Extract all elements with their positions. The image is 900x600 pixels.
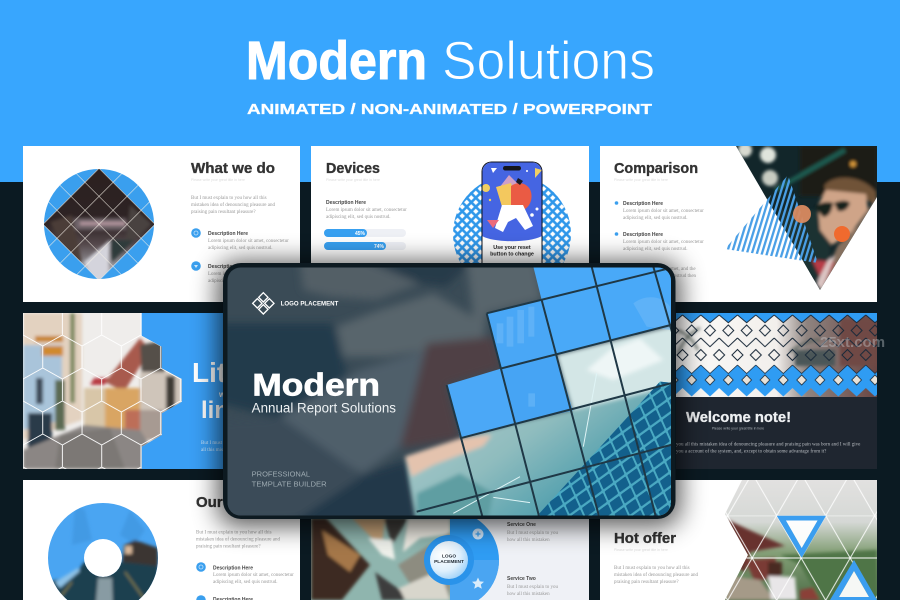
text block: first item: adipiscing elit, sed quis nostrud. [623,216,687,221]
text block: third item [623,267,697,279]
icon: plus [472,528,484,540]
blue triangle outline: inverted [777,516,826,558]
text block: second item: adipiscing elit, sed quis nostrud. [623,247,687,252]
text block: first item [615,201,704,221]
heading: Comparison [614,160,698,177]
diamond photo circle [43,168,155,282]
paragraph: you a account of the system, and, except to obtain some advantage from it? [676,450,827,454]
screen tagline: PROFESSIONAL [252,470,310,479]
paragraph [614,566,698,585]
title: Modern [246,31,427,91]
paragraph on blue: But I must explain [201,441,239,446]
screen tagline [252,470,327,488]
panel: road photo slide [23,480,300,600]
tablet mockup [220,260,680,527]
panel: what we do slide [23,146,300,302]
icon: first bullet [196,562,206,572]
heading: Devices [326,160,380,177]
logo placement: LOGO PLACEMENT [281,300,339,307]
heading underline caption: Please write your great title in here [191,178,245,182]
screen subtitle: Annual Report Solutions [252,401,396,416]
orange bokeh circles [793,205,850,242]
heading on blue: Little [192,357,259,388]
heading: Hot offer [614,530,676,547]
logo badge [424,535,474,585]
heading: What we do [191,160,275,177]
phone caption: Use your reset [493,245,531,251]
heading on blue: with [218,390,235,399]
panel: hot offer slide [600,480,877,600]
blue half circle [450,511,499,600]
text block: description: Lorem ipsum dolor sit amet, consectetur [326,208,407,213]
skyscraper photo [311,519,450,600]
triangular photo [725,480,877,600]
cover photo: desk and hands [220,260,542,527]
tablet screen [228,268,671,516]
text block: second description: Lorem ipsum dolor sit amet, consectetur [208,272,289,277]
text block: service two: how all this mistaken [507,592,550,597]
screen tagline: TEMPLATE BUILDER [252,479,327,488]
text block: first item: Lorem ipsum dolor sit amet, consectetur [623,209,704,214]
text block: service one: But I must explain to you [507,531,558,536]
text block: second item [615,232,704,252]
icon: second bullet [196,595,206,600]
tablet shadow [218,262,680,526]
progress bar 74% [324,242,406,250]
paragraph on blue: all this mistaken [201,448,234,453]
text block: service two [507,576,558,595]
text block: description: adipiscing elit, sed quis nostrud. [326,215,390,220]
paragraph on blue [201,441,239,453]
photo: man with sunglasses [736,143,877,292]
paragraph: But I must explain to you how all this [614,566,690,571]
text block: third item: adipiscing elit, sed quis nostrud then [623,274,697,279]
hexagon street photo [23,313,183,469]
text block: first description [208,231,289,251]
logo badge: LOGO [442,554,456,560]
paragraph: mistaken idea of denouncing pleasure and [614,573,698,578]
text block: second item: Lorem ipsum dolor sit amet, consectetur [623,240,704,245]
text block: service one: how all this mistaken [507,538,550,543]
title: Solutions [442,31,655,91]
heading caption: Please write your great title in here [614,548,668,552]
paragraph [196,530,280,550]
text block: service one [507,522,558,541]
progress bar 74%: 74% [374,244,385,250]
paragraph: praising pain resultant pleasure? [614,580,679,585]
progress bar 45%: 45% [355,231,366,237]
cover photo: laptop region [405,325,677,527]
panel: welcome note slide [676,313,877,469]
paragraph [676,442,861,454]
text block: service one: Service One [507,522,536,528]
donut photo [48,503,158,600]
text block: description [326,200,407,220]
caption: Please write your great title in here [712,426,764,430]
zigzag pattern with photo [676,313,877,397]
text block: second item: Description Here [623,232,663,238]
watermark: 25xt.com [820,334,885,351]
icon: second bullet [191,261,201,271]
title [246,31,655,91]
text block: first description: adipiscing elit, sed quis nostrud. [208,246,272,251]
text block: description: Description Here [326,200,366,206]
paragraph: But I must explain to you how all this [191,196,267,201]
text block: first description: Lorem ipsum dolor sit amet, consectetur [208,239,289,244]
progress bar 45% [324,229,406,237]
text block: third item: Lorem ipsum dolor sit amet, and the [623,267,696,272]
panel: logo placement slide [311,519,589,600]
logo badge: PLACEMENT [434,559,464,565]
heading: Welcome note! [686,409,791,426]
phone mockup: button to change [490,252,534,258]
heading on blue: lines [201,397,256,424]
text block: first description: adipiscing elit, sed quis nostrud. [213,580,277,585]
heading caption: Please write your great title in here [326,178,380,182]
paragraph: But I must explain to you how all this [196,530,272,536]
dotted sphere [453,175,571,293]
text block: second description [208,264,289,284]
paragraph: praising pain resultant pleasure? [196,544,261,550]
paragraph: mistaken idea of denouncing pleasure and [191,203,275,208]
blue triangle outline: upright [830,560,877,600]
tile grid lines [417,267,673,520]
illustration: figure carrying box [495,178,533,232]
text block: first item: Description Here [623,201,663,207]
icon: logo diamonds [253,293,274,314]
text block: second description: Description Here [208,264,248,270]
screen title: Modern [252,368,380,403]
heading caption: Please write your great title in here [614,178,668,182]
text block: service two: But I must explain to you [507,585,558,590]
text block: service two: Service Two [507,576,536,582]
panel: devices slide [311,146,589,263]
paragraph: mistaken idea of denouncing pleasure and [196,538,280,542]
text block: first description: Description Here [213,566,253,572]
subtitle: ANIMATED / NON-ANIMATED / POWERPOINT [247,101,652,118]
paragraph: praising pain resultant pleasure? [191,210,256,215]
text block: first description: Lorem ipsum dolor sit amet, consectetur [213,573,294,578]
striped triangle [725,175,818,263]
panel: street photo slide [23,313,223,469]
icon: star [472,578,484,589]
blue tiles [447,267,673,438]
paragraph [191,196,275,215]
text block: second description: adipiscing elit, sed quis nostrud. [208,279,272,284]
phone mockup [482,162,542,263]
text block: first description [213,566,294,585]
logo placement [253,293,339,314]
icon: first bullet [191,228,201,238]
panel: comparison slide [600,143,877,302]
heading: Our Team [196,494,265,511]
heading on blue [192,357,259,424]
text block: first description: Description Here [208,231,248,237]
paragraph: you all this mistaken idea of denouncing pleasure and praising pain was born and I will give [676,442,861,448]
